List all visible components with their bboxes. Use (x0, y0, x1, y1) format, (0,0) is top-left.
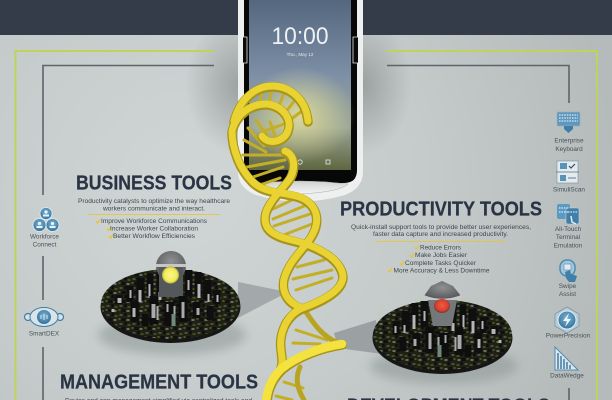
DNA rungs (243, 90, 332, 400)
heading: productivity tools: PRODUCTIVITY TOOLS (340, 198, 542, 220)
label: swipe assist: Assist (559, 291, 576, 298)
pointer wedge: business to DNA (238, 282, 288, 318)
label: datawedge: DataWedge (550, 372, 584, 380)
list: business benefits: Improve Workforce Communications (101, 218, 208, 225)
text: business description (78, 198, 230, 212)
list: productivity benefits (388, 244, 490, 274)
left frame lines (16, 51, 214, 400)
list: productivity benefits: Make Jobs Easier (415, 252, 468, 259)
text: productivity description (351, 224, 531, 238)
DNA helix (232, 86, 343, 400)
text: productivity description: faster data capture and increased productivity. (373, 231, 508, 238)
label: smartdex: SmartDEX (29, 330, 60, 338)
label: simuliscan: SimuliScan (553, 186, 585, 194)
icon: workforce connect (33, 208, 59, 232)
list: productivity benefits: More Accuracy & Less Downtime (394, 268, 490, 274)
icon: simuliscan (556, 161, 579, 183)
icon: datawedge (555, 347, 578, 370)
icon: all-touch terminal emulation (557, 204, 579, 224)
heading: business tools: BUSINESS TOOLS (76, 172, 232, 194)
icon: smartdex (24, 308, 64, 326)
yellow light bulb (162, 266, 179, 284)
label: enterprise keyboard: Keyboard (555, 146, 583, 153)
label: workforce connect: Connect (33, 242, 57, 248)
phone date: Thu., May 12 (287, 52, 314, 57)
icon: swipe assist (560, 260, 577, 282)
red heart bulb (434, 299, 450, 313)
DNA strands, shadow pass (232, 87, 343, 400)
list: business benefits: Better Workflow Efficiencies (113, 233, 196, 240)
label: all-touch terminal emulation: Terminal (556, 234, 580, 241)
top dark header bar (0, 0, 612, 35)
text: productivity description: Quick-install support tools to provide better user experiences, (351, 224, 531, 231)
list: productivity benefits: Complete Tasks Quicker (405, 260, 477, 267)
label: powerprecision: PowerPrecision (546, 332, 591, 340)
text: business description: workers communicate and interact. (102, 206, 205, 212)
label: swipe assist: Swipe (559, 283, 576, 290)
phone nav buttons (298, 160, 330, 164)
DNA strands, highlight pass (232, 86, 343, 367)
divider: business (88, 213, 220, 216)
right frame lines (387, 51, 597, 400)
icon: enterprise keyboard (557, 112, 580, 133)
list: business benefits: Increase Worker Collaboration (110, 226, 198, 232)
label: workforce connect: Workforce (30, 234, 59, 240)
text: business description: Productivity catalysts to optimize the way healthcare (78, 198, 230, 205)
list: productivity benefits: Reduce Errors (420, 244, 462, 252)
city: business tools (98, 251, 246, 355)
list: business benefits (96, 218, 208, 240)
DNA back strands (297, 312, 338, 400)
label: enterprise keyboard: Enterprise (554, 138, 584, 144)
label: all-touch terminal emulation: All-Touch (555, 226, 581, 233)
phone clock: 10:00 (272, 23, 328, 50)
pointer wedge: productivity to DNA (334, 320, 382, 354)
label: all-touch terminal emulation: Emulation (554, 242, 583, 249)
divider: productivity (375, 240, 506, 243)
phone device (238, 0, 363, 202)
heading: management tools: MANAGEMENT TOOLS (60, 370, 258, 394)
icon: powerprecision (555, 307, 579, 333)
city: productivity tools (370, 281, 518, 384)
